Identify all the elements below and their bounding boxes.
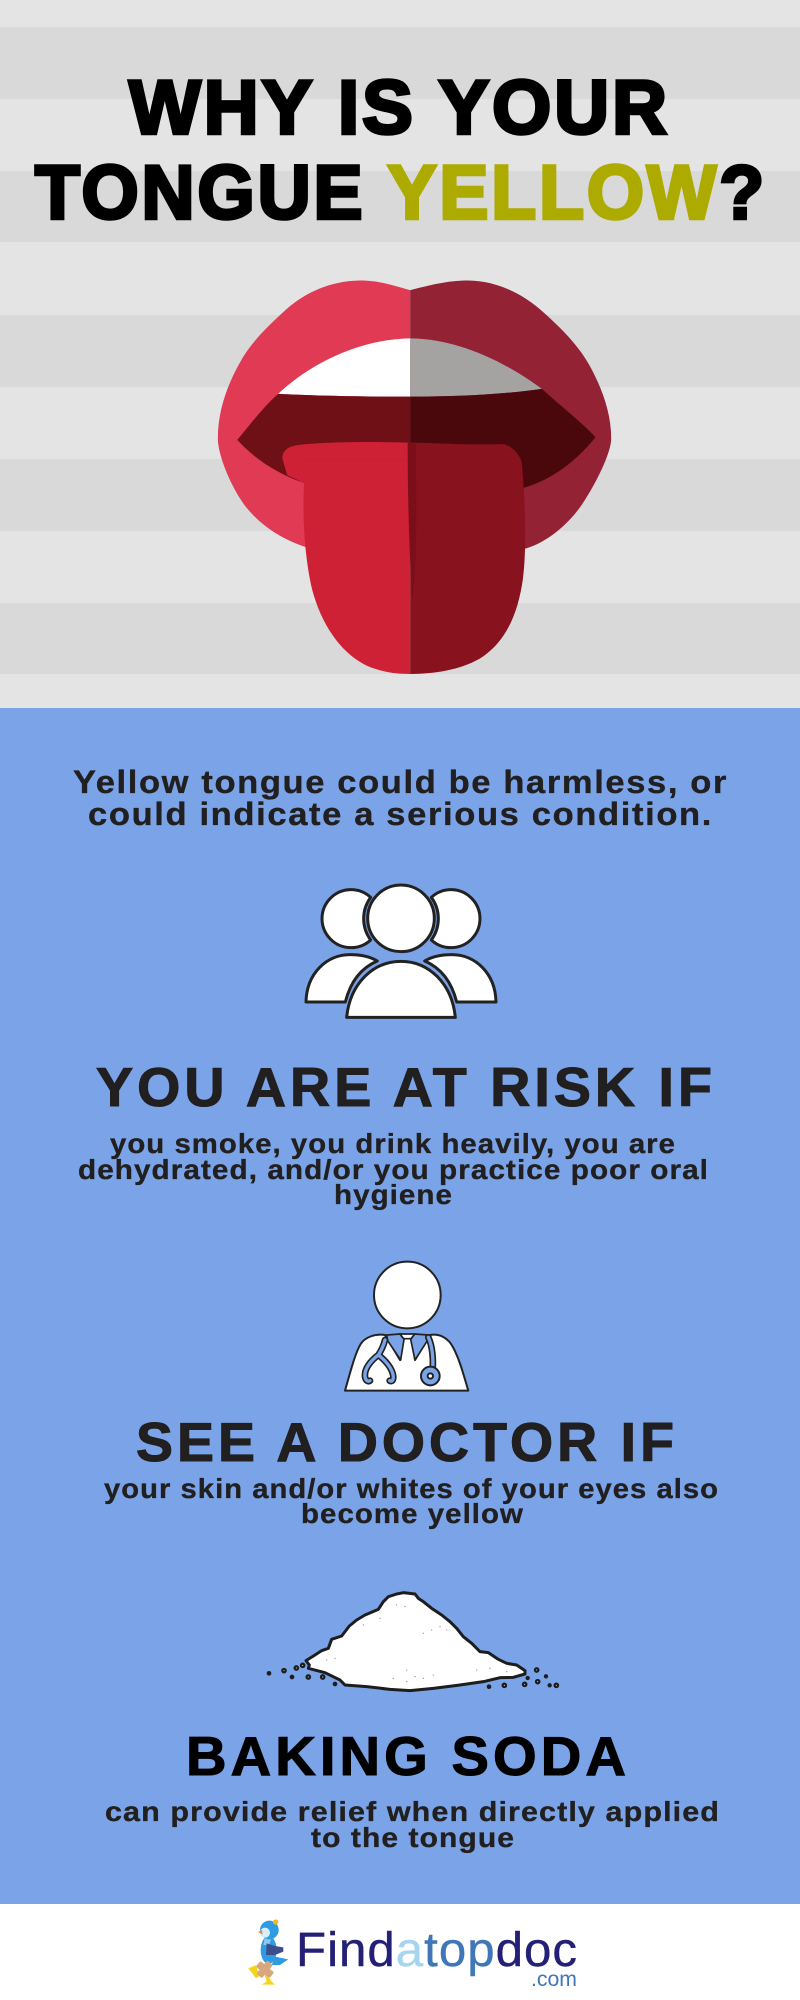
icon: duck mascot: [248, 1919, 288, 1985]
panel: striped header background: [0, 0, 800, 708]
intro text: [73, 764, 728, 832]
icon: baking soda pile: [268, 1593, 558, 1691]
text: baking soda relief: can provide relief when directly applied: [105, 1796, 720, 1827]
text: risk factors: [78, 1128, 709, 1210]
text: baking soda relief: to the tongue: [311, 1822, 515, 1853]
icon: doctor with stethoscope: [345, 1262, 468, 1391]
title: TONGUE YELLOW?: [35, 150, 767, 236]
intro text: could indicate a serious condition.: [88, 796, 713, 832]
logo wordmark: .com: [531, 1968, 577, 1991]
text: doctor warning: your skin and/or whites of your eyes also: [104, 1473, 719, 1504]
text: risk factors: dehydrated, and/or you practice poor oral: [78, 1154, 709, 1185]
panel: white footer: [0, 1904, 800, 2000]
text: baking soda relief: [105, 1796, 720, 1853]
panel: blue content section: [0, 708, 800, 1904]
heading: baking soda: BAKING SODA: [186, 1725, 630, 1787]
title: [35, 66, 767, 236]
text: risk factors: hygiene: [334, 1179, 453, 1210]
icon: group of people: [306, 885, 496, 1017]
text: risk factors: you smoke, you drink heavily, you are: [110, 1128, 676, 1159]
heading: see a doctor if: SEE A DOCTOR IF: [136, 1411, 678, 1473]
logo wordmark: Findatopdoc: [296, 1924, 578, 1977]
illustration: mouth and tongue: [218, 281, 611, 674]
heading: you are at risk if: YOU ARE AT RISK IF: [96, 1056, 716, 1118]
text: doctor warning: become yellow: [301, 1498, 524, 1529]
intro text: Yellow tongue could be harmless, or: [73, 764, 728, 800]
text: doctor warning: [104, 1473, 719, 1529]
title: WHY IS YOUR: [129, 66, 670, 150]
